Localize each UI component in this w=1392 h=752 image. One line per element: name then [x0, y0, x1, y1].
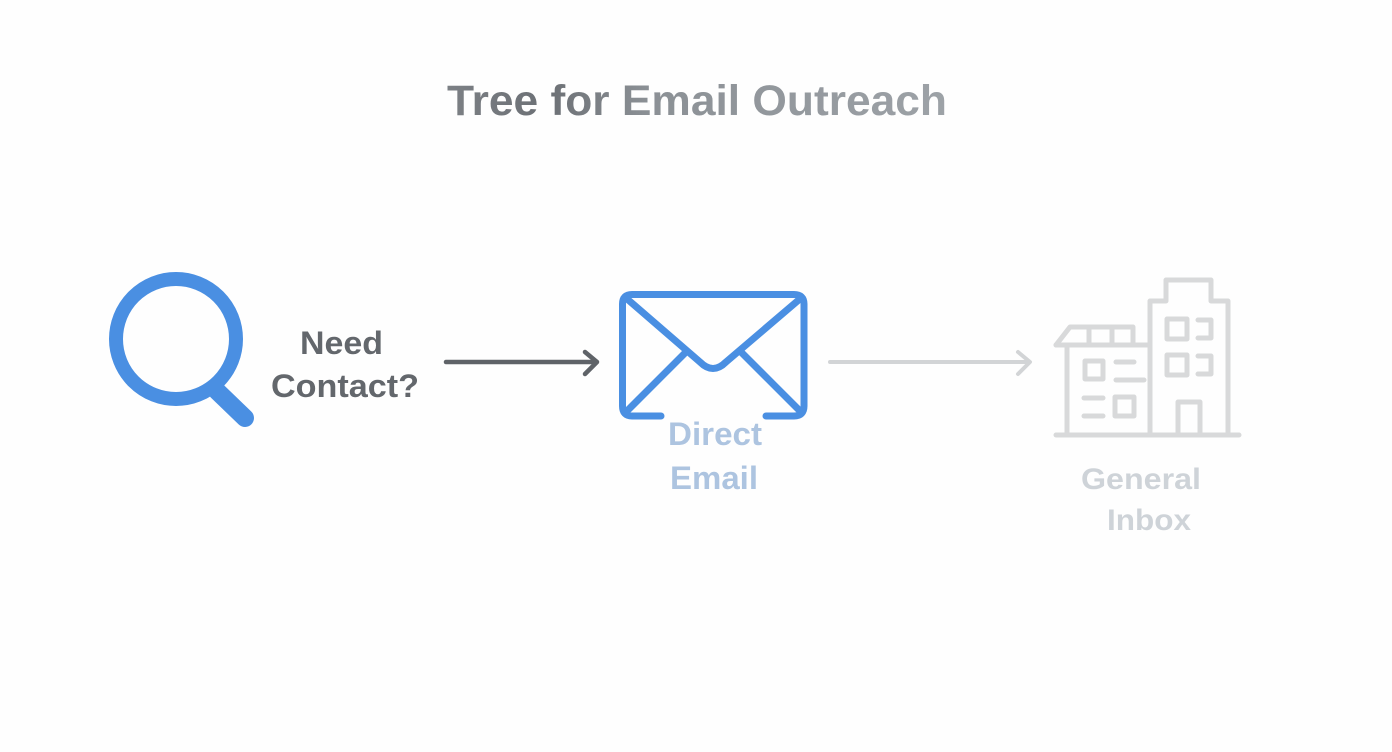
label: general inbox: General	[1081, 463, 1201, 496]
step: general inbox	[1056, 280, 1239, 537]
arrow: to direct email	[446, 352, 597, 374]
icon: office buildings	[1056, 280, 1239, 435]
arrow: to general inbox	[830, 352, 1030, 374]
label: need contact: Need	[300, 325, 383, 361]
label: need contact: Contact?	[271, 368, 419, 404]
icon: magnifying glass	[116, 279, 245, 418]
label: direct email	[668, 416, 762, 496]
label: general inbox	[1081, 463, 1201, 537]
label: general inbox: Inbox	[1107, 504, 1191, 537]
label: need contact	[271, 325, 419, 404]
step: need contact	[116, 279, 419, 418]
title: Tree for Email Outreach	[447, 77, 947, 125]
icon: envelope	[622, 294, 804, 416]
label: direct email: Email	[670, 460, 758, 496]
label: direct email: Direct	[668, 416, 762, 452]
step: direct email	[622, 294, 804, 496]
